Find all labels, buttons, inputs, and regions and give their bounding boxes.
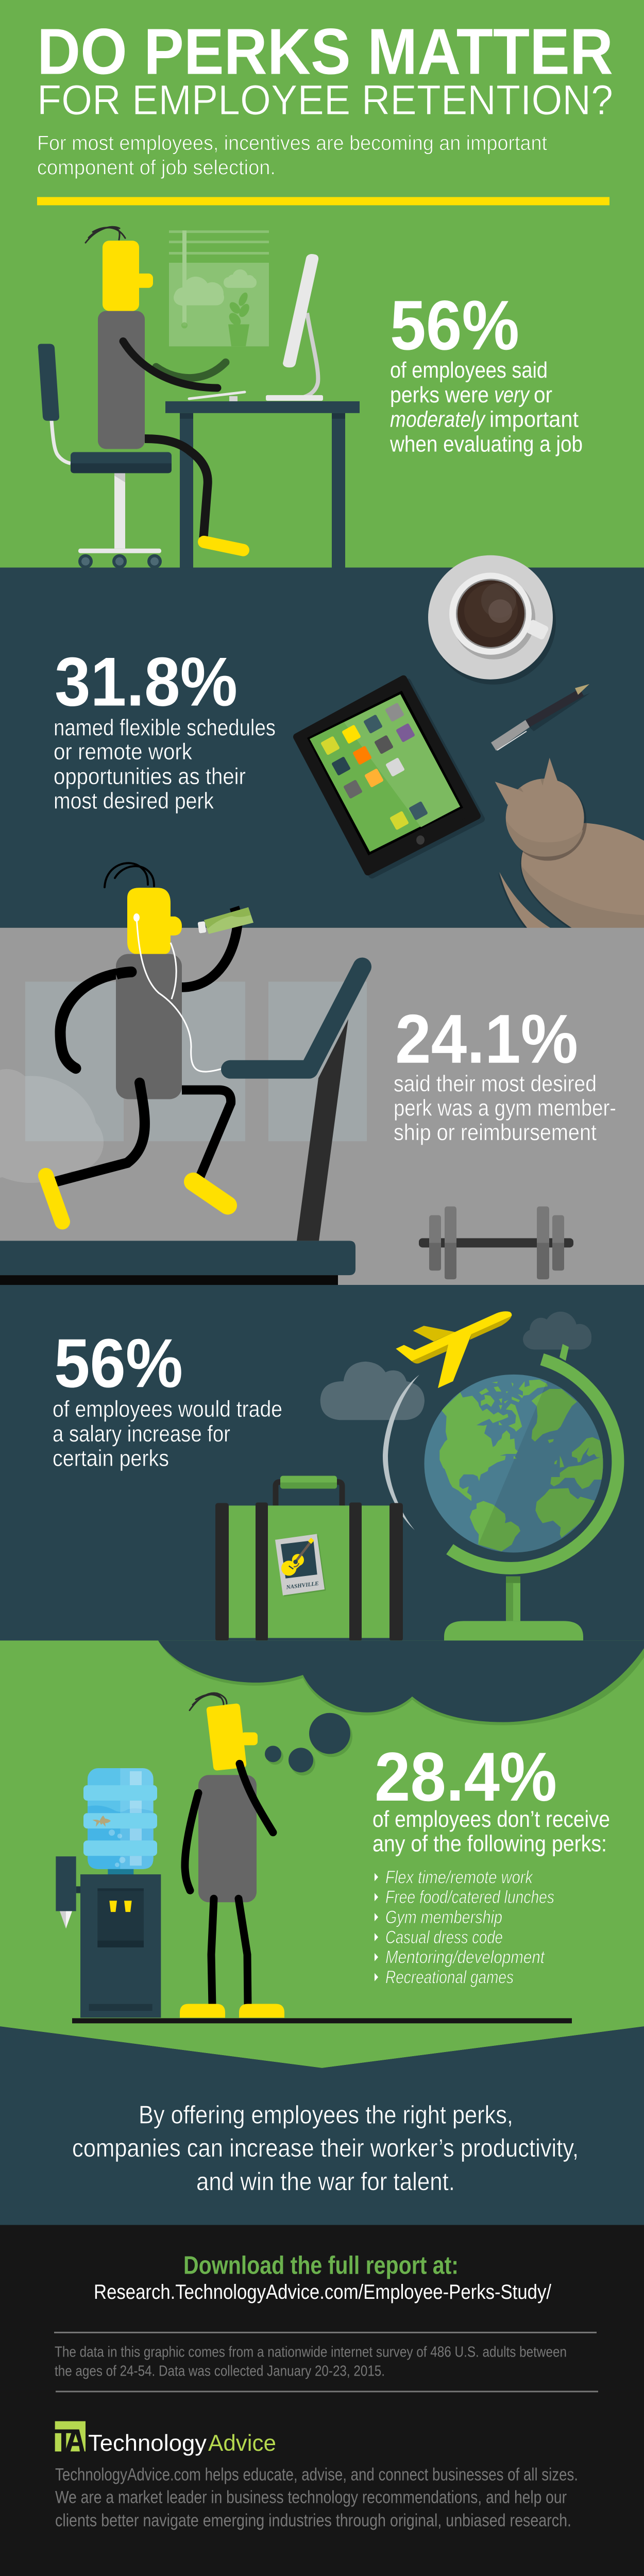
- icon: Nashville sticker: [275, 1534, 326, 1597]
- office chair: [38, 344, 172, 569]
- stat: 24.1 percent: ship or reimbursement: [394, 1119, 597, 1145]
- panel: flexible schedules: [0, 555, 644, 929]
- cloud: small: [523, 1312, 591, 1350]
- methodology note: [55, 2344, 567, 2380]
- TechnologyAdvice logo: Technology: [88, 2430, 207, 2456]
- flight path arc: [383, 1375, 419, 1530]
- stat: 56 percent perks important: or: [534, 382, 552, 408]
- closing text: companies can increase their worker’s productivity,: [72, 2134, 579, 2162]
- closing text: and win the war for talent.: [196, 2168, 455, 2196]
- floor line: [72, 2018, 572, 2023]
- stat: 56 percent trade salary: of employees would trade: [53, 1396, 282, 1422]
- office window: [169, 230, 269, 346]
- panel: closing statement: [0, 2026, 644, 2225]
- stat: 31.8 percent: 31.8%: [55, 643, 238, 720]
- stat: 56 percent perks important: moderately: [390, 407, 486, 432]
- keyboard: [189, 392, 245, 401]
- TechnologyAdvice logo: [55, 2421, 276, 2456]
- icon: suitcase: [215, 1476, 403, 1641]
- icon: globe: [425, 1344, 618, 1641]
- panel: perks not received: [0, 1640, 644, 2068]
- desk: [165, 401, 360, 568]
- subtitle: component of job selection.: [37, 157, 276, 179]
- stat: 28.4 percent: [372, 1738, 610, 1857]
- download heading: Download the full report at:: [183, 2251, 459, 2279]
- list of perks: [375, 1867, 554, 1988]
- treadmill: [0, 1019, 355, 1285]
- icon: coffee cup on saucer: [428, 555, 556, 685]
- thought cloud: [158, 1640, 644, 1725]
- icon: water cooler: [56, 1768, 161, 2018]
- stat: 56 percent trade salary: certain perks: [53, 1445, 169, 1471]
- standing worker figure: [180, 1693, 284, 2018]
- stat: 31.8 percent: most desired perk: [54, 788, 214, 814]
- worker figure: [86, 227, 243, 550]
- stat: 56 percent trade salary: a salary increase for: [53, 1420, 230, 1447]
- list of perks: Flex time/remote work: [385, 1867, 533, 1887]
- report URL: Research.TechnologyAdvice.com/Employee-Perks-Study/: [94, 2281, 552, 2303]
- stat: 28.4 percent: 28.4%: [375, 1738, 557, 1816]
- stat: 56 percent trade salary: 56%: [54, 1324, 183, 1402]
- list of perks: Recreational games: [385, 1968, 514, 1988]
- panel: header and desk worker: [0, 0, 644, 569]
- stat: 56 percent perks important: 56%: [390, 286, 519, 364]
- title: [37, 15, 613, 124]
- computer monitor: [266, 254, 323, 401]
- stat: 31.8 percent: [54, 643, 276, 814]
- stat: 56 percent perks important: when evaluating a job: [389, 432, 583, 456]
- icon: Nashville sticker: NASHVILLE: [285, 1581, 319, 1590]
- icon: cat: [495, 758, 644, 929]
- title: FOR EMPLOYEE RETENTION?: [37, 77, 613, 124]
- company description: [55, 2465, 578, 2530]
- icon: dumbbell: [419, 1207, 573, 1279]
- icon: pen: [491, 684, 590, 751]
- panel: salary trade: [0, 1283, 644, 1641]
- subtitle: [37, 132, 547, 179]
- panel: footer: [0, 2225, 644, 2575]
- stat: 56 percent perks important: [389, 286, 583, 456]
- stat: 31.8 percent: named flexible schedules: [54, 714, 276, 740]
- stat: 56 percent perks important: perks were: [390, 382, 489, 408]
- stat: 24.1 percent: [394, 1000, 616, 1145]
- stat: 28.4 percent: any of the following perks:: [372, 1831, 607, 1857]
- panel: gym membership: [0, 863, 644, 1285]
- stat: 56 percent trade salary: [53, 1324, 282, 1471]
- thought bubbles: [265, 1713, 352, 1775]
- stat: 56 percent perks important: important: [489, 407, 579, 432]
- cloud: large: [320, 1362, 425, 1420]
- list of perks: Mentoring/development: [385, 1947, 545, 1968]
- stat: 31.8 percent: opportunities as their: [54, 763, 246, 789]
- closing text: [72, 2102, 579, 2196]
- icon: airplane: [396, 1311, 512, 1388]
- TechnologyAdvice logo: Advice: [208, 2430, 276, 2456]
- stat: 24.1 percent: said their most desired: [394, 1071, 597, 1097]
- list of perks: Gym membership: [385, 1907, 502, 1927]
- runner figure: [46, 863, 362, 1222]
- stat: 28.4 percent: of employees don’t receive: [372, 1806, 610, 1832]
- methodology note: the ages of 24-54. Data was collected January 20-23, 2015.: [55, 2363, 385, 2380]
- icon: tablet with app grid: [297, 679, 481, 875]
- stat: 31.8 percent: or remote work: [54, 738, 192, 765]
- yellow divider bar: [37, 197, 609, 205]
- dust clouds behind runner: [0, 1069, 104, 1183]
- stat: 24.1 percent: 24.1%: [395, 1000, 578, 1078]
- list of perks: Free food/catered lunches: [385, 1887, 554, 1907]
- stat: 56 percent perks important: very: [494, 382, 530, 408]
- gym windows: [25, 981, 367, 1141]
- closing text: By offering employees the right perks,: [139, 2102, 513, 2129]
- list of perks: Casual dress code: [385, 1927, 503, 1947]
- subtitle: For most employees, incentives are becoming an important: [37, 132, 547, 155]
- stat: 56 percent perks important: of employees said: [390, 358, 548, 383]
